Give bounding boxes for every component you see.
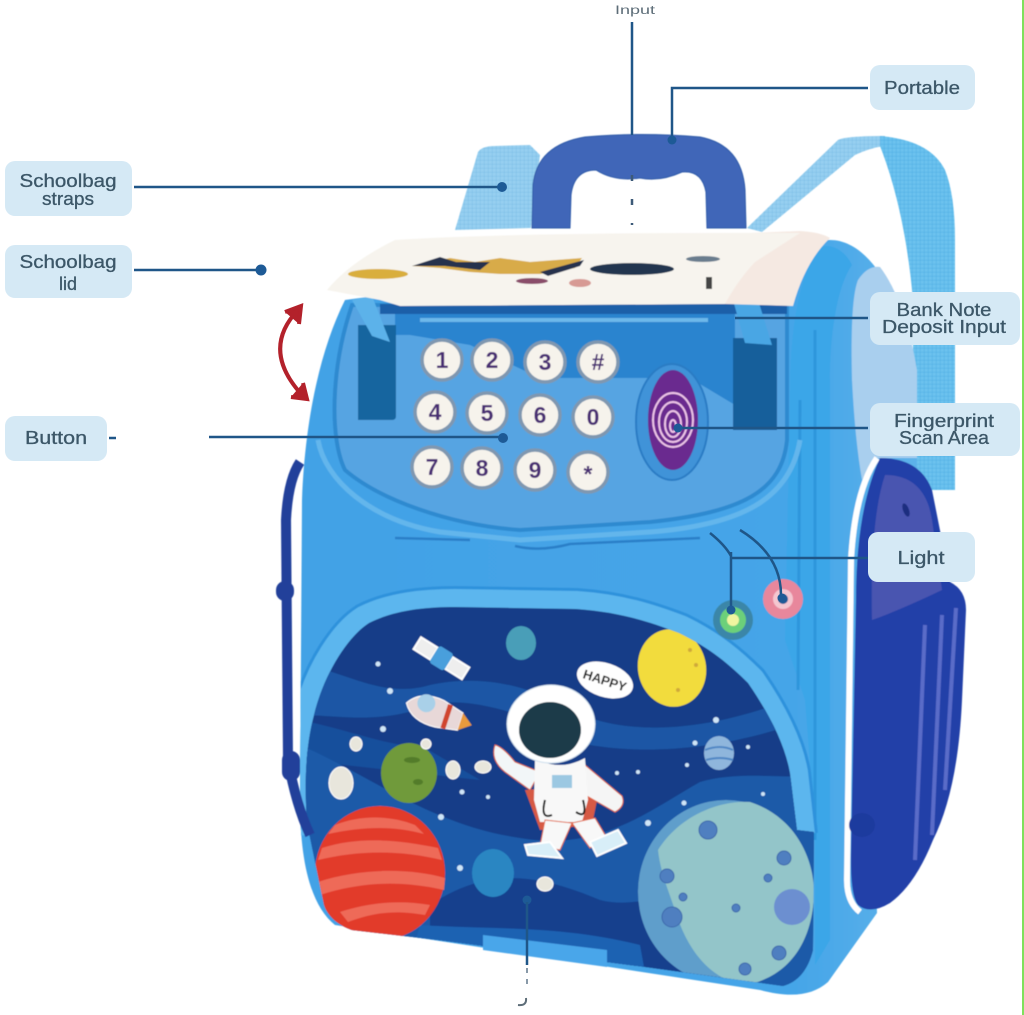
astronaut left arm [494, 745, 540, 790]
keypad buttons: 1 [436, 347, 449, 373]
bottom band [418, 925, 644, 967]
scene frame outline [304, 607, 797, 835]
keypad buttons: 8 [476, 455, 489, 481]
callout: button [5, 416, 508, 461]
lid side [725, 231, 830, 306]
callout: top clipped label: Input [615, 3, 656, 17]
left lid hinge recess [358, 325, 396, 420]
left hinge [352, 296, 390, 342]
callout: bank note deposit input: Deposit Input [882, 317, 1006, 337]
lid stickers [348, 256, 720, 289]
scanner purple oval [648, 370, 698, 470]
backpack body [300, 240, 917, 995]
keypad buttons: * [584, 461, 593, 487]
astronaut helmet [507, 685, 595, 763]
stars [376, 662, 765, 871]
speech bubble [576, 660, 634, 700]
callout: schoolbag straps: Schoolbag [20, 171, 117, 191]
astronaut backpack [525, 785, 600, 830]
keypad recess [335, 305, 787, 530]
planet: teal [506, 626, 536, 660]
left side strap [286, 462, 310, 835]
left strap buckles [285, 590, 291, 772]
side stripe lines [798, 330, 815, 840]
right strap vertical [880, 136, 955, 490]
pocket ribs [915, 608, 956, 860]
astronaut right arm [580, 765, 623, 812]
callout: schoolbag lid: lid [59, 274, 77, 294]
lid [327, 231, 830, 306]
fingerprint scanner [636, 364, 708, 480]
right side pocket [851, 458, 966, 910]
keypad upper shade [395, 308, 735, 405]
rocket [405, 693, 472, 732]
callout: portable: Portable [884, 78, 960, 98]
keypad buttons [412, 340, 618, 492]
callout: fingerprint scan area [674, 403, 1020, 456]
callout: bottom line [518, 896, 532, 1005]
keypad buttons: 7 [426, 454, 438, 480]
bottom slot [483, 935, 607, 967]
right white gap [847, 458, 877, 912]
astronaut [494, 685, 626, 858]
speech bubble: HAPPY [581, 666, 629, 695]
keypad buttons: 2 [486, 347, 498, 373]
callout: light [710, 530, 975, 614]
planet: red [315, 806, 445, 940]
keypad buttons: 4 [429, 399, 442, 425]
keypad buttons: 9 [529, 457, 541, 483]
left strap [455, 145, 540, 230]
indicator light: pink [763, 579, 803, 619]
lid top [327, 233, 800, 306]
callout: light: Light [898, 548, 944, 568]
callout: schoolbag lid: Schoolbag [20, 252, 117, 272]
green edge line [1022, 0, 1024, 1015]
callout: portable [668, 65, 975, 144]
astronaut chest plate [552, 775, 572, 788]
backpack product illustration [285, 134, 966, 1000]
pocket knob [849, 813, 875, 837]
callout: schoolbag straps: straps [42, 189, 94, 209]
indicator light: green [713, 600, 753, 640]
space scene [300, 600, 830, 1000]
planet: yellow [636, 628, 708, 708]
red open arrow [280, 306, 307, 399]
lid underside strip [420, 318, 708, 322]
scene frame [304, 607, 797, 835]
astronaut visor [519, 702, 581, 758]
side panel light [852, 267, 917, 480]
left wave [300, 720, 480, 780]
lower wave [300, 745, 820, 1000]
keypad buttons: 0 [587, 404, 599, 430]
keypad buttons: 5 [481, 400, 494, 426]
callout: schoolbag straps [5, 161, 507, 216]
slot shadow [380, 304, 787, 314]
scanner ring [636, 364, 708, 480]
planet: blue [472, 849, 514, 897]
planet: striped [704, 736, 734, 770]
side bright stripes [785, 246, 852, 965]
asteroids [329, 737, 553, 891]
upper wave [314, 672, 775, 750]
pocket highlight [872, 475, 942, 620]
astronaut torso [534, 758, 588, 822]
keypad buttons: # [592, 349, 605, 375]
right hinge [733, 290, 772, 345]
recess outer rim [318, 440, 800, 540]
satellite [412, 635, 471, 682]
callout: fingerprint scan area: Fingerprint [894, 411, 994, 431]
pocket mark [901, 502, 911, 518]
callout: bank note deposit input [735, 292, 1020, 345]
handle [532, 134, 746, 228]
callout: schoolbag lid [5, 245, 266, 298]
planet: green [381, 743, 437, 803]
right strap diagonal [747, 136, 885, 232]
callout: bank note deposit input: Bank Note [896, 300, 992, 320]
astronaut belt hoses [544, 800, 584, 816]
scene base [306, 606, 812, 938]
keypad buttons: 3 [539, 349, 551, 375]
callout: button: Button [25, 428, 87, 448]
callout: fingerprint scan area: Scan Area [899, 428, 990, 448]
right lid hinge recess [733, 338, 777, 430]
fingerprint rings [653, 393, 693, 447]
moon [638, 800, 814, 984]
bottom dark wave [430, 878, 682, 972]
astronaut legs [540, 818, 607, 850]
astronaut boots [525, 830, 626, 858]
keypad buttons: 6 [534, 402, 546, 428]
lower flap seam [395, 538, 700, 549]
